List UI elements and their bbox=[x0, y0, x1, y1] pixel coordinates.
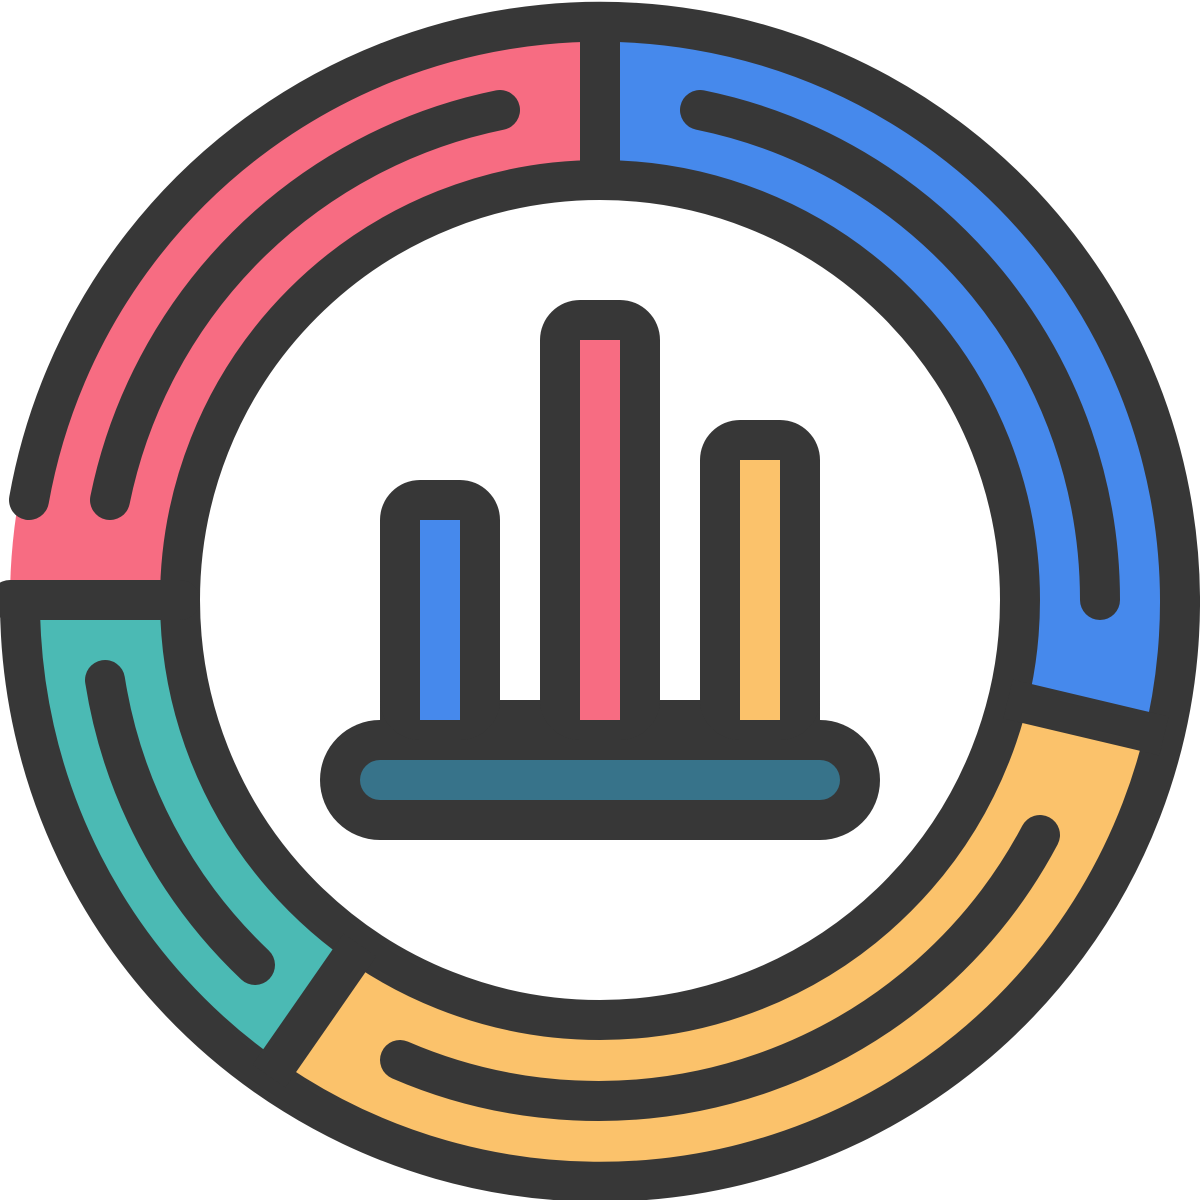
segment: red bbox=[10, 10, 600, 600]
segment: blue bbox=[600, 10, 1190, 739]
segment: teal bbox=[10, 600, 600, 1084]
bar: red bbox=[540, 300, 660, 740]
inner arcs bbox=[105, 110, 1100, 1101]
bar: yellow bbox=[700, 420, 820, 740]
base bbox=[320, 720, 880, 840]
bar: blue bbox=[380, 480, 500, 740]
segment: yellow bbox=[263, 600, 1173, 1190]
bar chart bbox=[320, 300, 880, 840]
